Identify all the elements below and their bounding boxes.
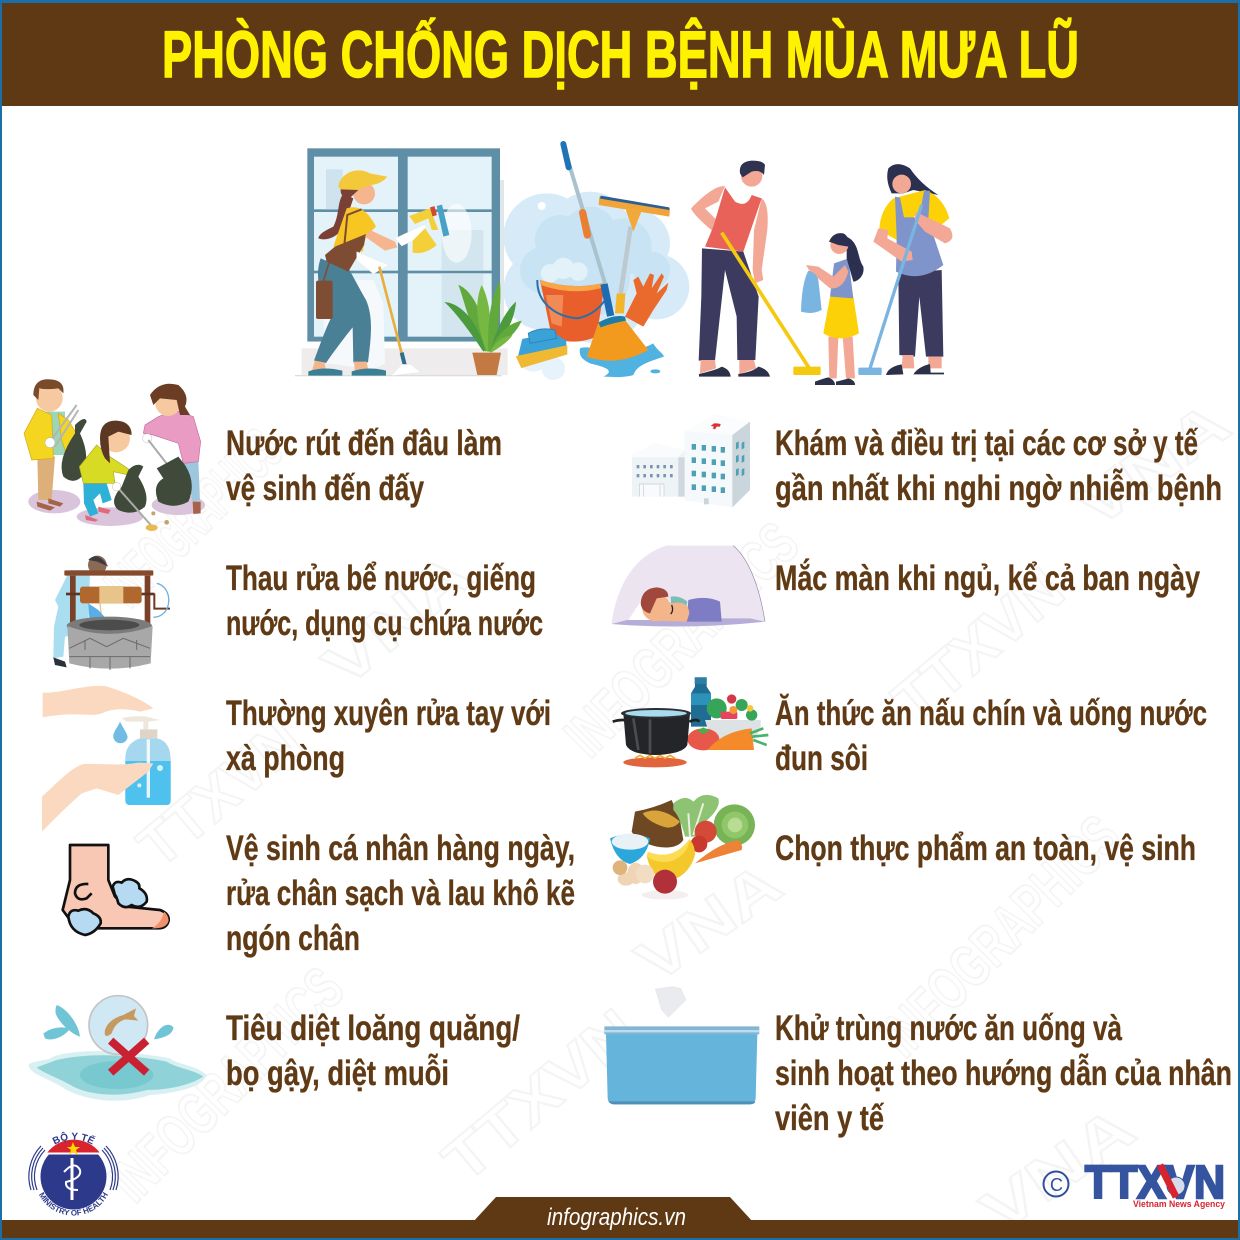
text: TTXVN: [880, 555, 1077, 735]
text: [775, 424, 1222, 508]
icon: water basin with chlorine powder: [604, 987, 759, 1104]
icon: group of food items: [610, 795, 755, 900]
text: VNA: [310, 539, 484, 700]
icon: child sleeping under net: [612, 546, 765, 627]
tip: disinfect drinking and household water: [604, 987, 1232, 1138]
mother: [858, 164, 952, 375]
text: ngón chân: [226, 919, 360, 958]
logo: Ministry of Health: MINISTRY OF HEALTH: [39, 1192, 108, 1216]
text: [775, 1009, 1232, 1138]
logo: Ministry of Health: BỘ Y TẾ: [52, 1132, 96, 1144]
tip: choose safe food: [610, 795, 1196, 900]
tip: wash hands with soap: [42, 686, 551, 832]
cleaning tools: bucket, mop, squeegee, gloves, brush: [444, 144, 689, 380]
daughter: [801, 233, 864, 385]
family cleaning with mops: [691, 161, 952, 385]
text: Vệ sinh cá nhân hàng ngày,: [226, 829, 575, 868]
logo: Ministry of Health: [28, 1132, 119, 1216]
footer band with website: [2, 1197, 1238, 1238]
text: TTXVN: [430, 996, 650, 1195]
icon: hands and soap dispenser: [42, 686, 171, 832]
text: đun sôi: [775, 739, 868, 778]
potted plant: [444, 282, 522, 375]
tip: medical examination at nearest facility: [632, 415, 1222, 508]
logo: TTXVN Vietnam News Agency: TTXVN: [1085, 1156, 1225, 1208]
hero illustration: house cleaning: [295, 144, 952, 385]
father: [691, 161, 821, 377]
tip: clean up after water recedes: [24, 379, 502, 531]
text: Khử trùng nước ăn uống và: [775, 1009, 1122, 1048]
text: TTXVN: [125, 707, 314, 880]
text: VNA: [624, 849, 794, 996]
text: INFOGRAPHICS: [867, 803, 1133, 1069]
text: xà phòng: [226, 739, 345, 778]
text: Thau rửa bể nước, giếng: [226, 559, 536, 598]
icon: man and water well: [53, 556, 170, 670]
icon: boiling pot, bottle, vegetables: [613, 677, 768, 767]
icon: puddle with larva and red cross: [28, 996, 207, 1101]
text: INFOGRAPHICS: [552, 510, 811, 769]
text: [226, 829, 575, 958]
text: viên y tế: [775, 1099, 884, 1138]
logo: TTXVN Vietnam News Agency: C: [1050, 1175, 1063, 1195]
text: VNA: [1064, 388, 1240, 541]
text: Thường xuyên rửa tay với: [226, 694, 551, 733]
tip: sleep under mosquito net: [612, 546, 1200, 627]
tip: eat cooked food and drink boiled water: [613, 677, 1207, 778]
woman cleaning window with cleaning tools: [295, 148, 508, 376]
text: [226, 424, 502, 508]
tip: wash tanks and wells: [53, 556, 543, 670]
icon: hospital buildings: [632, 415, 750, 507]
text: [226, 1009, 520, 1093]
tip: kill larvae and mosquitoes: [28, 996, 520, 1101]
text: vệ sinh đến đấy: [226, 469, 424, 508]
header band with title: [2, 3, 1238, 106]
text: [775, 694, 1207, 778]
logo: TTXVN Vietnam News Agency: Vietnam News Agency: [1133, 1199, 1226, 1210]
icon: foot with soap bubbles: [63, 845, 169, 935]
text: [226, 559, 543, 643]
text: rửa chân sạch và lau khô kẽ: [226, 874, 575, 913]
text: Nước rút đến đâu làm: [226, 424, 502, 463]
text: INFOGRAPHICS: [97, 955, 356, 1214]
text: INFOGRAPHICS: [92, 416, 295, 619]
tip: personal hygiene and foot washing: [63, 829, 575, 958]
text: bọ gậy, diệt muỗi: [226, 1053, 449, 1093]
text: nước, dụng cụ chứa nước: [226, 604, 543, 643]
text: Tiêu diệt loăng quăng/: [226, 1009, 520, 1048]
text: [226, 694, 551, 778]
icon: three people collecting trash: [24, 379, 205, 531]
website label: infographics.vn: [547, 1204, 686, 1231]
